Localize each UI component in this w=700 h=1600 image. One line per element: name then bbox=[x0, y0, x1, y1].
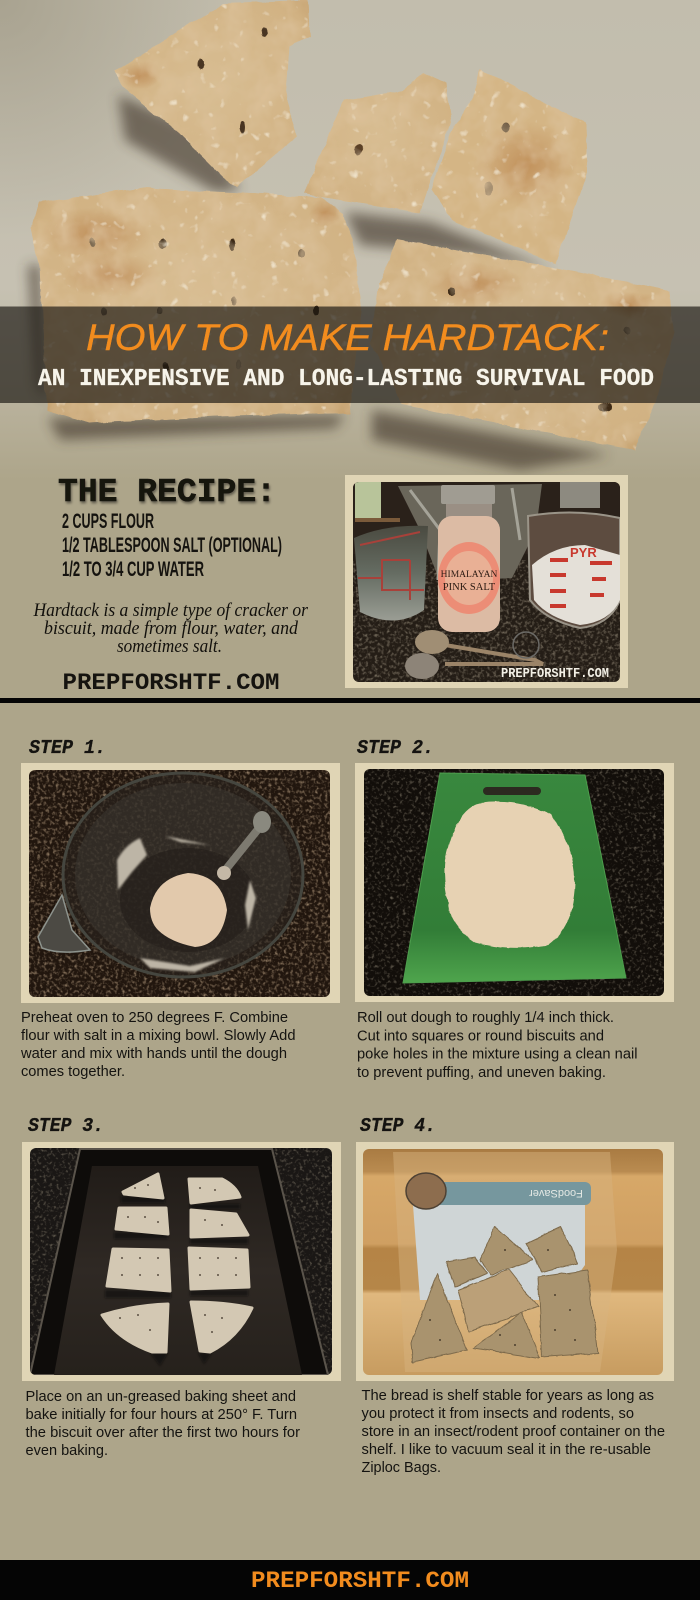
panel: step 3 bbox=[22, 1115, 341, 1459]
step 3 photo: biscuits on baking sheet bbox=[22, 1142, 341, 1381]
poke holes bbox=[119, 1184, 237, 1333]
photo watermark: PREPFORSHTF.COM bbox=[501, 666, 609, 682]
jar of pink salt: HIMALAYAN bbox=[441, 570, 497, 580]
step 3 label: STEP 3. bbox=[28, 1115, 104, 1137]
shadows under crackers bbox=[28, 95, 610, 470]
measuring spoons bbox=[405, 630, 543, 679]
website credit: PREPFORSHTF.COM bbox=[62, 670, 280, 696]
sealed biscuits bbox=[411, 1227, 598, 1362]
vacuum bag bbox=[393, 1152, 617, 1372]
step 4 label: STEP 4. bbox=[360, 1115, 436, 1137]
step 2 instructions: Cut into squares or round biscuits and bbox=[357, 1028, 604, 1044]
flour measuring cup: PYR bbox=[570, 545, 597, 560]
cracker centre bbox=[304, 73, 451, 213]
jar of pink salt bbox=[438, 485, 500, 632]
panel: hero photo of hardtack bbox=[0, 0, 700, 480]
dough ball bbox=[150, 873, 227, 947]
ingredient list: 2 CUPS FLOUR bbox=[62, 510, 154, 533]
subtitle: AN INEXPENSIVE AND LONG-LASTING SURVIVAL FOOD bbox=[38, 366, 654, 393]
jar of pink salt: PINK SALT bbox=[443, 582, 496, 593]
hardtack description: Hardtack is a simple type of cracker or bbox=[33, 600, 309, 621]
ingredient list bbox=[62, 510, 282, 581]
step 2 photo: rolled dough on cutting board bbox=[355, 763, 674, 1002]
hardtack description: sometimes salt. bbox=[117, 636, 222, 657]
step 3 instructions bbox=[26, 1389, 300, 1459]
cracker top left bbox=[115, 0, 310, 187]
cracker right of centre bbox=[431, 69, 587, 263]
step 2 instructions: Roll out dough to roughly 1/4 inch thick. bbox=[357, 1010, 614, 1026]
step 2 instructions bbox=[357, 1010, 638, 1081]
step 4 instructions bbox=[362, 1388, 665, 1476]
panel: the recipe bbox=[33, 474, 309, 696]
step 1 instructions: flour with salt in a mixing bowl. Slowly Add bbox=[21, 1028, 296, 1044]
panel: step 4 bbox=[356, 1115, 674, 1476]
divider bar bbox=[0, 698, 700, 703]
biscuit holes bbox=[429, 1249, 576, 1346]
glass bowl bbox=[38, 773, 303, 977]
step 3 instructions: even baking. bbox=[26, 1443, 108, 1459]
biscuits bbox=[102, 1174, 252, 1352]
step 1 photo: dough in glass bowl bbox=[21, 763, 340, 1003]
step 1 instructions: water and mix with hands until the dough bbox=[20, 1046, 287, 1062]
footer website: PREPFORSHTF.COM bbox=[251, 1568, 469, 1594]
step 4 instructions: you protect it from insects and rodents, so bbox=[362, 1406, 634, 1422]
panel: step 1 bbox=[20, 737, 340, 1080]
step 1 instructions: Preheat oven to 250 degrees F. Combine bbox=[21, 1010, 288, 1026]
step 2 instructions: poke holes in the mixture using a clean nail bbox=[357, 1046, 638, 1062]
step 4 instructions: Ziploc Bags. bbox=[362, 1460, 441, 1476]
step 3 instructions: Place on an un-greased baking sheet and bbox=[26, 1389, 296, 1405]
cracker large right bbox=[370, 240, 674, 450]
photo: ingredients bbox=[345, 475, 628, 688]
step 4 photo: vacuum-sealed hardtack: FoodSaver bbox=[529, 1187, 583, 1199]
step 1 instructions: comes together. bbox=[21, 1064, 125, 1080]
hardtack description bbox=[33, 600, 309, 657]
cracker large left bbox=[31, 188, 362, 423]
panel: step 2 bbox=[355, 737, 674, 1081]
step 4 photo: vacuum-sealed hardtack bbox=[356, 1142, 674, 1381]
step 2 label: STEP 2. bbox=[357, 737, 434, 759]
ingredient list: 1/2 TO 3/4 CUP WATER bbox=[62, 558, 204, 581]
footer bar bbox=[0, 1560, 700, 1600]
step 4 instructions: The bread is shelf stable for years as long as bbox=[362, 1388, 654, 1404]
step 2 instructions: to prevent puffing, and uneven baking. bbox=[357, 1065, 606, 1081]
water measuring cup bbox=[354, 526, 428, 621]
ingredient list: 1/2 TABLESPOON SALT (OPTIONAL) bbox=[62, 534, 282, 557]
step 4 instructions: shelf. I like to vacuum seal it in the re-usable bbox=[362, 1442, 651, 1458]
step 4 instructions: store in an insect/rodent proof container on the bbox=[362, 1424, 665, 1440]
flour measuring cup bbox=[528, 512, 620, 628]
title banner bbox=[0, 306, 700, 403]
flour streaks bbox=[117, 836, 256, 972]
back glass bowl bbox=[398, 484, 542, 582]
recipe heading: THE RECIPE: bbox=[58, 474, 276, 511]
step 1 instructions bbox=[20, 1010, 296, 1080]
step 1 label: STEP 1. bbox=[29, 737, 106, 759]
step 3 instructions: bake initially for four hours at 250° F. Turn bbox=[26, 1407, 297, 1423]
step 3 instructions: the biscuit over after the first two hours for bbox=[26, 1425, 300, 1441]
biscuit shadows bbox=[105, 1196, 248, 1366]
title: HOW TO MAKE HARDTACK: bbox=[86, 317, 609, 358]
hardtack description: biscuit, made from flour, water, and bbox=[44, 618, 298, 639]
